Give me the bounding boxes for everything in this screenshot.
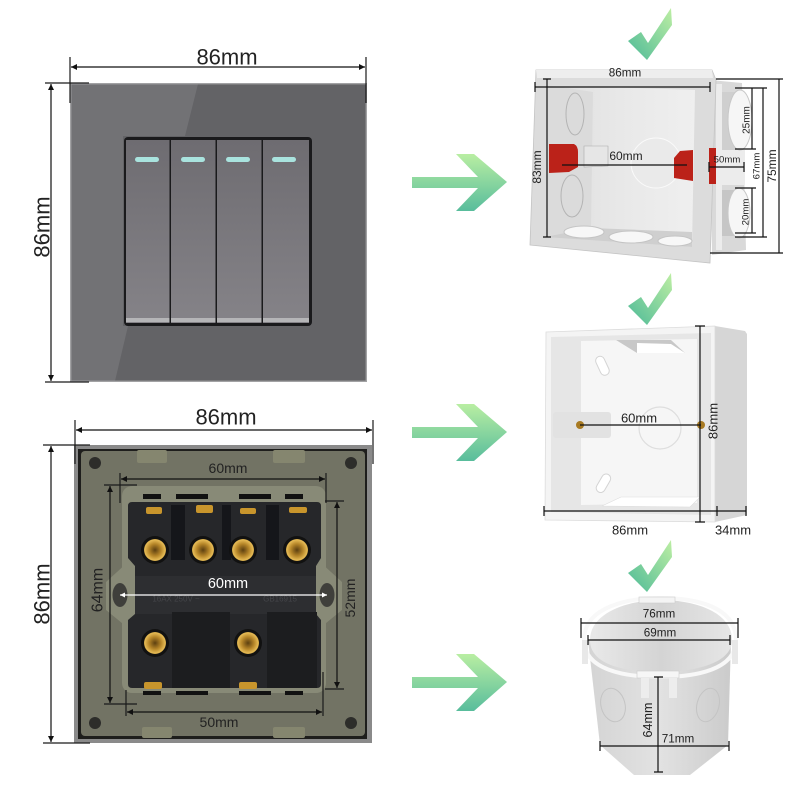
arrow: to box 2 [412,404,507,461]
dimension: bottom 86mm [544,506,700,538]
dimension: terminal top 60mm: 60mm [209,460,247,476]
dimension: 52mm [325,501,358,689]
dimension: front width: 86mm [196,44,258,70]
dimension: bottom 86mm: 86mm [612,522,648,538]
dimension: front height [30,83,89,382]
dimension: front height: 86mm [30,196,54,258]
dimension: 64mm: 64mm [90,568,106,612]
dimension: 60mm [562,149,687,165]
panel: box 1 square mounting box [530,70,752,263]
dimension: 64mm [641,677,663,772]
molded standard text: GB16915 [263,594,297,604]
oval slots [594,355,612,494]
dimension: 52mm: 52mm [342,579,358,617]
dimension: vertical 86mm: 86mm [706,403,720,439]
back plate [74,445,372,743]
top clip [639,597,675,603]
metal clip [584,146,608,167]
dimension: 60mm: 60mm [621,410,657,426]
corner screw holes [89,457,357,729]
side oval knockouts [561,93,584,217]
arrow: to box 3 [412,654,507,711]
round knockout [631,138,681,188]
side housing [710,80,746,255]
glass faceplate [70,83,367,382]
dimension: 69mm: 69mm [644,626,676,640]
molded rating text: 16AX 250V ~ [152,594,200,604]
side knockout lower [722,188,750,238]
round knockout [639,407,681,449]
interior [551,333,711,515]
dimension: 64mm [90,485,137,704]
brass screws [141,536,311,657]
dimension: 86mm: 86mm [609,66,641,80]
dimension: 86mm [535,66,710,92]
dimension: 25mm: 25mm [742,106,752,134]
dimension: 76mm: 76mm [643,608,675,620]
screw post [553,412,611,438]
dimension: 76mm [581,608,738,638]
interior left wall [545,85,593,237]
bottom knockouts [564,226,692,246]
rocker 3 [217,140,262,323]
dimension: 75mm: 75mm [765,149,779,183]
dimension: 75mm [710,79,783,253]
dimension: 60mm [580,410,701,426]
panel: box 3 round mounting box [582,597,738,775]
dimension: 60mm: 60mm [609,149,643,163]
top frame highlight [536,70,713,78]
panel: switch front view [70,83,367,382]
dimension: 50mm [126,672,323,730]
dimension: 50mm [709,154,744,172]
dimension: 25mm [735,88,756,149]
dimension: 34mm [700,506,751,538]
front rim [545,326,715,522]
brass terminals [144,505,307,689]
dimension: 20mm: 20mm [740,199,752,225]
rocker 1 [126,140,170,323]
contact slots [143,494,303,695]
red strip [709,148,716,184]
dimension: 67mm: 67mm [752,153,762,179]
icon: check mark 2 [628,273,672,325]
rocker 2 [171,140,216,323]
dimension: 50mm: 50mm [200,714,238,730]
rim [584,598,736,677]
mounting slots [112,583,334,607]
dimension: terminal top 60mm [120,460,326,503]
mounting tabs [137,450,305,738]
rocker frame [124,137,312,326]
dimension: 67mm [735,88,767,237]
interior cavity [545,85,695,247]
dimension: 69mm [588,626,730,645]
dimension: 50mm: 50mm [714,154,740,166]
front clip [637,671,679,698]
side ears [582,640,738,664]
dimension: 83mm [530,79,551,237]
raised collar [106,486,342,693]
dimension: 34mm: 34mm [715,522,751,538]
red clip right [674,150,693,181]
panel: switch back view [74,445,372,743]
body [588,640,731,775]
dimension: back height: 86mm [30,563,54,625]
dimension: 64mm: 64mm [641,702,655,738]
box 2 dimensions [544,326,751,538]
arrow: to box 1 [412,154,507,211]
dimension: 83mm: 83mm [530,150,544,184]
dimension: mounting holes 60mm: 60mm [208,576,248,592]
box 3 dimensions [581,608,738,772]
dimension: back width: 86mm [195,404,257,430]
front frame [530,70,716,263]
side wall [715,326,747,522]
rocker 4 [263,140,309,323]
icon: check mark 3 [628,540,672,592]
dimension: back height [30,445,90,743]
side knockout upper [722,90,752,150]
red clip left [549,144,578,173]
dimension: front width [70,44,366,103]
dimension: back width [75,404,373,464]
brass screws [576,421,705,429]
interior back [590,600,732,672]
dimension: 20mm [735,188,756,233]
top window [616,340,685,353]
side ribs [716,84,745,250]
bottom window [602,497,700,507]
indicator lights [135,157,296,162]
interior bottom wall [545,228,692,247]
box 1 dimensions [530,66,783,253]
dimension: vertical 86mm [695,326,720,522]
panel: box 2 surface mount box [545,326,747,522]
body knockouts [597,685,723,725]
terminal block [128,502,321,688]
icon: check mark 1 [628,8,672,60]
dimension: 71mm: 71mm [662,732,694,746]
dimension: 71mm [600,732,729,751]
interior back wall [581,339,697,505]
